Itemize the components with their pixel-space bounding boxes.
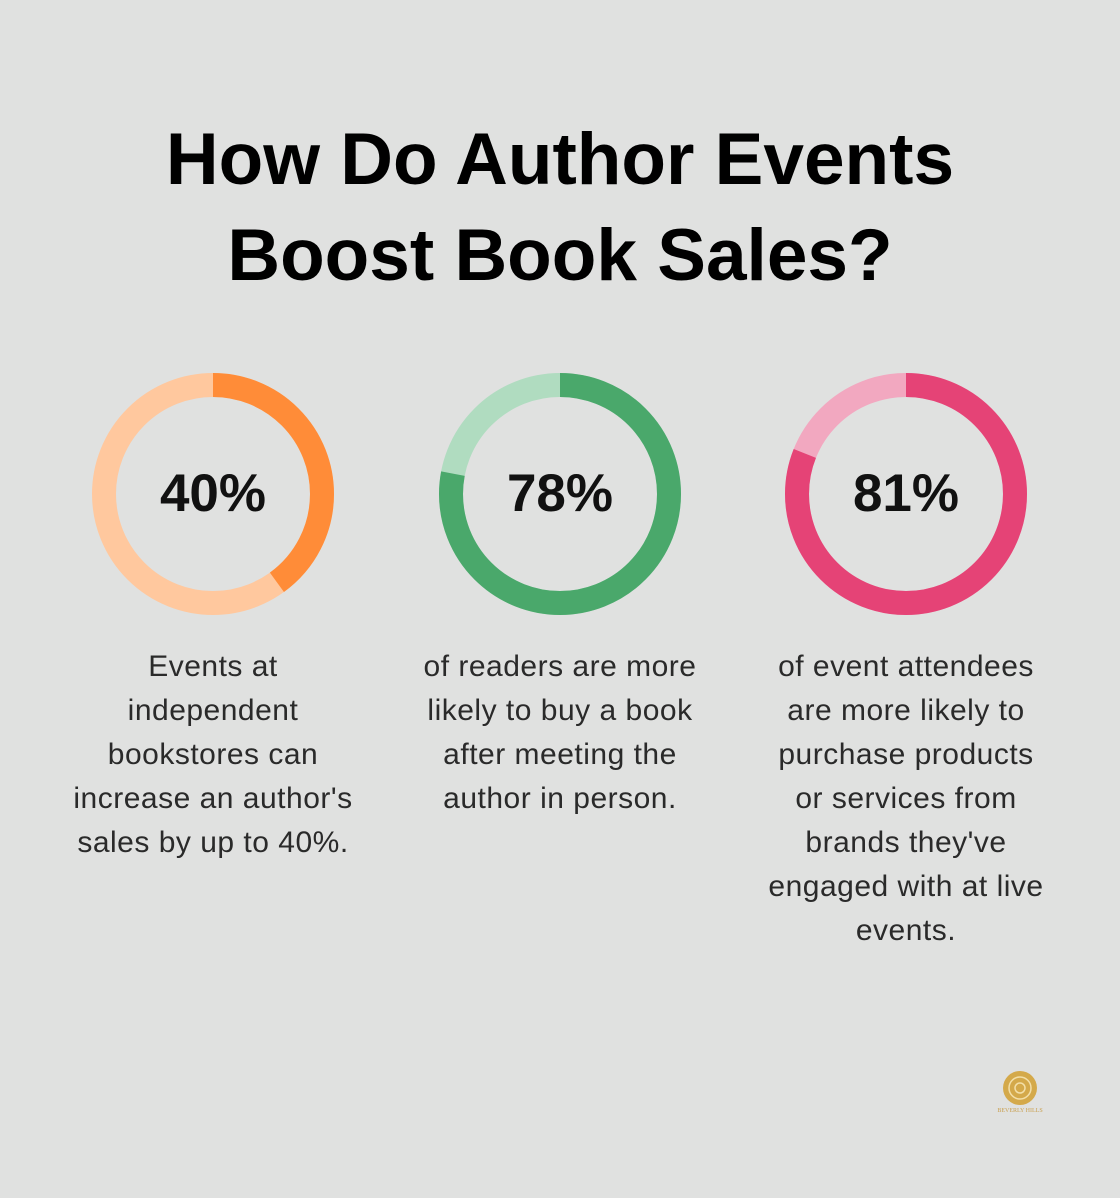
ring: 40%: 40% xyxy=(160,464,266,523)
text: 78% description: likely to buy a book xyxy=(427,694,693,727)
ring: 78%: 78% xyxy=(507,464,613,523)
text: 40% description: Events at xyxy=(148,650,278,683)
text: 40% description: bookstores can xyxy=(108,738,318,771)
text: 81% description: events. xyxy=(856,914,956,947)
text: 81% description: engaged with at live xyxy=(768,870,1044,903)
ring: 78% xyxy=(439,373,681,615)
ring: 81% xyxy=(785,373,1027,615)
text: 81% description: purchase products xyxy=(778,738,1034,771)
text: 81% description: of event attendees xyxy=(778,650,1034,683)
text: 40% description: independent xyxy=(128,694,298,727)
title: How Do Author Events xyxy=(166,119,954,200)
logo: BEVERLY HILLS xyxy=(997,1108,1043,1114)
text: 40% description: sales by up to 40%. xyxy=(77,826,349,859)
text: 40% description xyxy=(73,650,353,859)
ring: 81%: 81% xyxy=(853,464,959,523)
ring: 40% xyxy=(92,373,334,615)
text: 78% description: author in person. xyxy=(443,782,677,815)
title xyxy=(166,119,954,296)
text: 81% description: brands they've xyxy=(805,826,1007,859)
text: 40% description: increase an author's xyxy=(73,782,353,815)
title: Boost Book Sales? xyxy=(227,215,893,296)
logo xyxy=(997,1071,1043,1114)
text: 78% description: of readers are more xyxy=(424,650,696,683)
text: 81% description xyxy=(768,650,1044,947)
text: 81% description: or services from xyxy=(795,782,1017,815)
text: 81% description: are more likely to xyxy=(787,694,1025,727)
text: 78% description: after meeting the xyxy=(443,738,677,771)
text: 78% description xyxy=(424,650,696,815)
